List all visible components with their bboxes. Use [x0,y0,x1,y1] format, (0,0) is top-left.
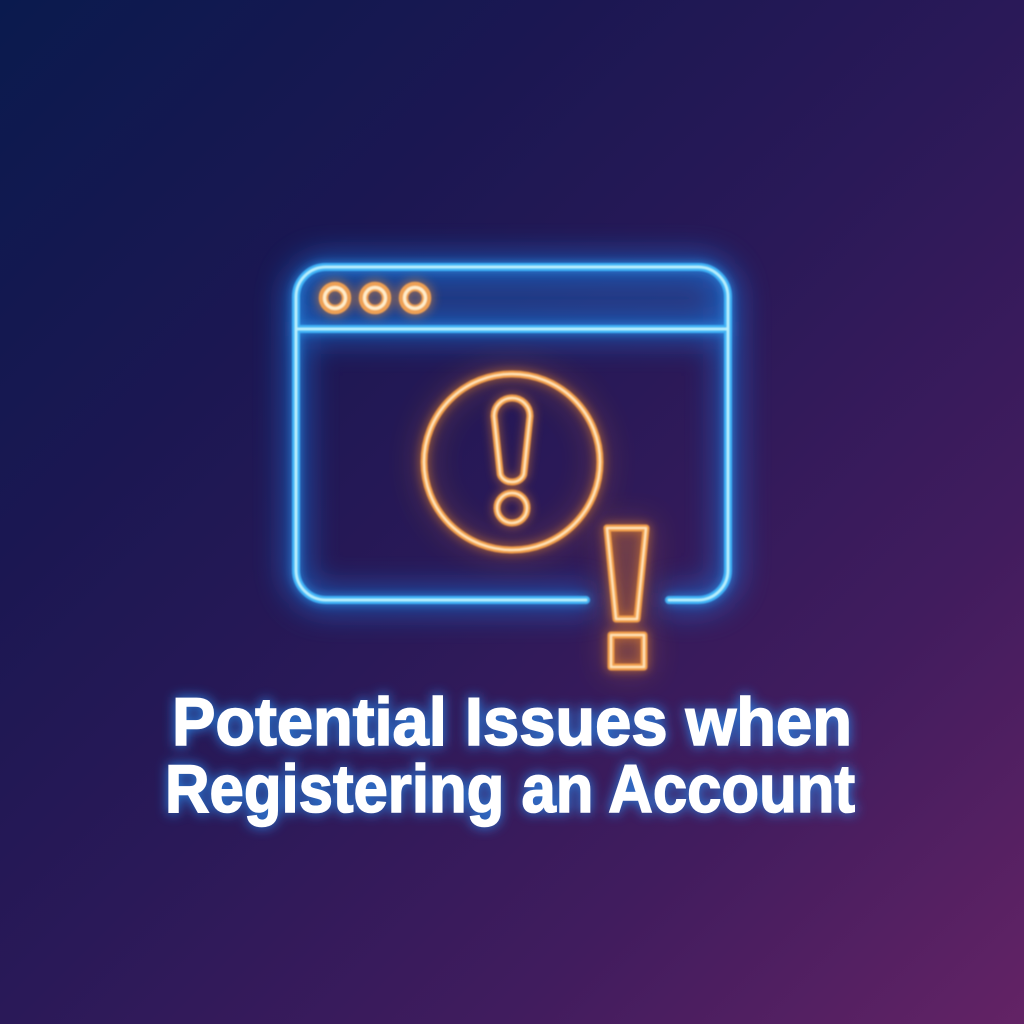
title [165,684,855,827]
title: Potential Issues when [172,684,852,760]
icon: circled exclamation mark [424,374,600,550]
icon: window control dots [323,286,427,310]
title: Registering an Account [165,751,855,827]
icon: large exclamation mark [607,528,646,667]
icon: browser window [296,267,728,600]
title: Potential Issues when [172,684,852,760]
title: Registering an Account [165,751,855,827]
